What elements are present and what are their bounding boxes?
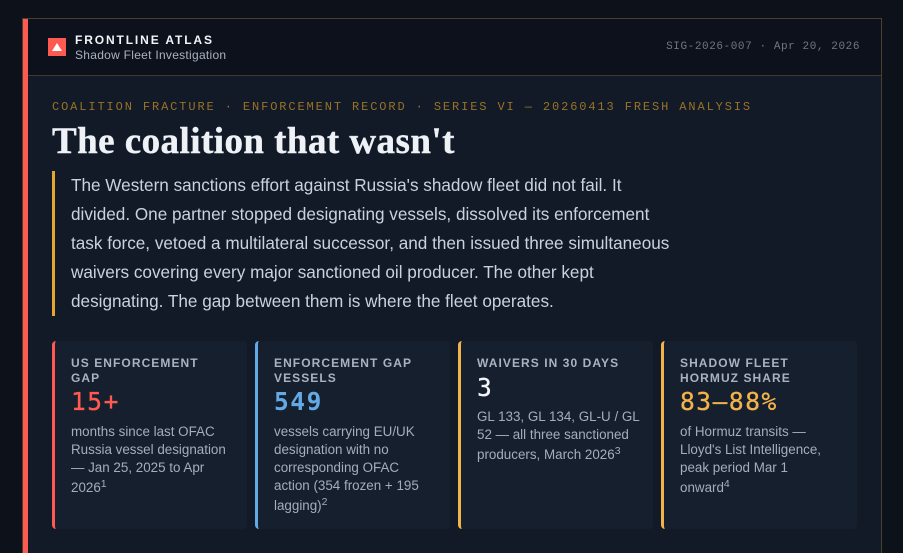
eyebrow: COALITION FRACTURE · ENFORCEMENT RECORD · SERIES VI — 20260413 FRESH ANALYSIS [52,100,752,114]
card label [71,356,199,385]
card label: SHADOW FLEET [680,356,789,370]
stat card: enforcement gap vessels [255,341,450,529]
card label: HORMUZ SHARE [680,371,791,385]
stat value: 3 [477,373,493,402]
stat card: shadow fleet Hormuz share [661,341,857,529]
card description [680,424,821,495]
card description: action (354 frozen + 195 [274,478,419,493]
card description: Russia vessel designation [71,442,226,457]
lede paragraph: divided. One partner stopped designating vessels, dissolved its enforcement [71,204,649,224]
icon: brand triangle [48,38,66,56]
lede paragraph [52,171,675,316]
card description: Lloyd's List Intelligence, [680,442,821,457]
card description: of Hormuz transits — [680,424,806,439]
card label: US ENFORCEMENT [71,356,199,370]
title: The coalition that wasn't [52,121,455,162]
lede paragraph: The Western sanctions effort against Russia's shadow fleet did not fail. It [71,175,621,195]
brand subtitle: Shadow Fleet Investigation [75,48,226,62]
left accent bar [23,19,28,553]
card description: onward4 [680,478,730,495]
card description: designation with no [274,442,389,457]
card label: GAP [71,371,100,385]
card label: ENFORCEMENT GAP [274,356,412,370]
card description: 52 — all three sanctioned [477,427,629,442]
card label [274,356,412,385]
document reference and date: SIG-2026-007 · Apr 20, 2026 [666,41,860,53]
header band [28,19,881,76]
stat value: 83–88% [680,387,778,416]
card description [274,424,419,513]
lede paragraph: waivers covering every major sanctioned oil producer. The other kept [71,262,594,282]
card description: GL 133, GL 134, GL-U / GL [477,409,640,424]
card description: 20261 [71,478,107,495]
card description: corresponding OFAC [274,460,399,475]
stat value: 15+ [71,387,120,416]
brand name: FRONTLINE ATLAS [75,33,214,47]
lede paragraph: designating. The gap between them is where the fleet operates. [71,291,554,311]
card description: lagging)2 [274,496,328,513]
card description [477,409,640,462]
stat value: 549 [274,387,323,416]
card description: vessels carrying EU/UK [274,424,415,439]
stat card: waivers in 30 days [458,341,653,529]
card label [680,356,791,385]
card description: producers, March 20263 [477,445,621,462]
card label: WAIVERS IN 30 DAYS [477,356,619,370]
stat card: US enforcement gap [52,341,247,529]
card description [71,424,226,495]
card description: peak period Mar 1 [680,460,788,475]
lede paragraph: task force, vetoed a multilateral successor, and then issued three simultaneous [71,233,669,253]
card label: VESSELS [274,371,337,385]
card description: — Jan 25, 2025 to Apr [71,460,204,475]
card description: months since last OFAC [71,424,215,439]
